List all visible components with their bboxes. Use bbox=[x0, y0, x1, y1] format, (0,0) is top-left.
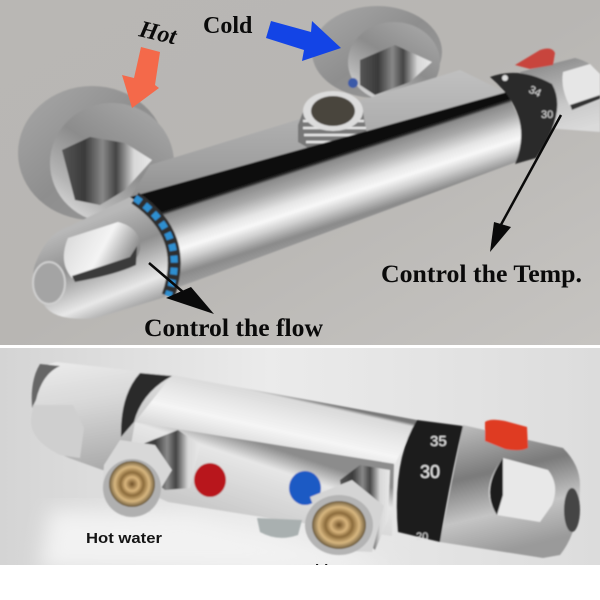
blue flow dial bbox=[135, 198, 174, 296]
panel: bottom photo, valve rear view bbox=[0, 348, 600, 579]
left wall plate, hot inlet bbox=[18, 86, 174, 223]
studio background bbox=[0, 348, 600, 565]
threaded outlet bbox=[298, 91, 367, 152]
right cap bbox=[440, 425, 580, 558]
cold water fitting bbox=[305, 465, 390, 555]
black temperature dial: 34 bbox=[527, 84, 543, 100]
black temperature dial: 30 bbox=[541, 109, 553, 121]
arrow: control the flow bbox=[149, 263, 214, 314]
main cylinder bbox=[130, 92, 522, 287]
left flow handle bbox=[33, 197, 172, 319]
outlet stub bbox=[257, 518, 302, 538]
main cylinder bbox=[134, 375, 417, 464]
label: Hot: Hot bbox=[136, 16, 180, 51]
hot water fitting bbox=[102, 430, 200, 517]
label: Cold water, cropped: Cold water bbox=[295, 562, 372, 579]
right wall plate, cold inlet bbox=[312, 6, 442, 102]
label: Control the flow: Control the flow bbox=[144, 313, 324, 342]
icon: red hot marker bbox=[194, 463, 226, 497]
wall background bbox=[0, 0, 600, 345]
black temperature dial: 35 bbox=[430, 433, 447, 450]
black temperature dial: 30 bbox=[420, 462, 440, 482]
right handle bbox=[520, 58, 600, 132]
black temperature dial bbox=[397, 420, 463, 543]
reflection on the table bbox=[38, 506, 256, 565]
mounting bar bbox=[146, 426, 395, 536]
mounting bar bbox=[130, 70, 505, 205]
black temperature dial: 20 bbox=[416, 531, 428, 543]
arrow: control the temperature bbox=[490, 115, 561, 252]
panel: top photo, valve wall view bbox=[0, 0, 600, 345]
arrow: cold inlet bbox=[266, 21, 341, 61]
label: Hot water: Hot water bbox=[86, 530, 162, 547]
valve: top view bbox=[18, 6, 600, 319]
label: Control the Temp.: Control the Temp. bbox=[381, 259, 582, 288]
red lever bbox=[515, 49, 555, 69]
label: Cold: Cold bbox=[203, 13, 253, 39]
red temperature button bbox=[485, 420, 528, 450]
valve: rear view bbox=[31, 362, 580, 558]
icon: blue cold marker bbox=[289, 471, 321, 505]
arrow: hot inlet bbox=[122, 47, 160, 108]
left cap bbox=[31, 362, 172, 478]
black temperature dial bbox=[490, 73, 557, 164]
